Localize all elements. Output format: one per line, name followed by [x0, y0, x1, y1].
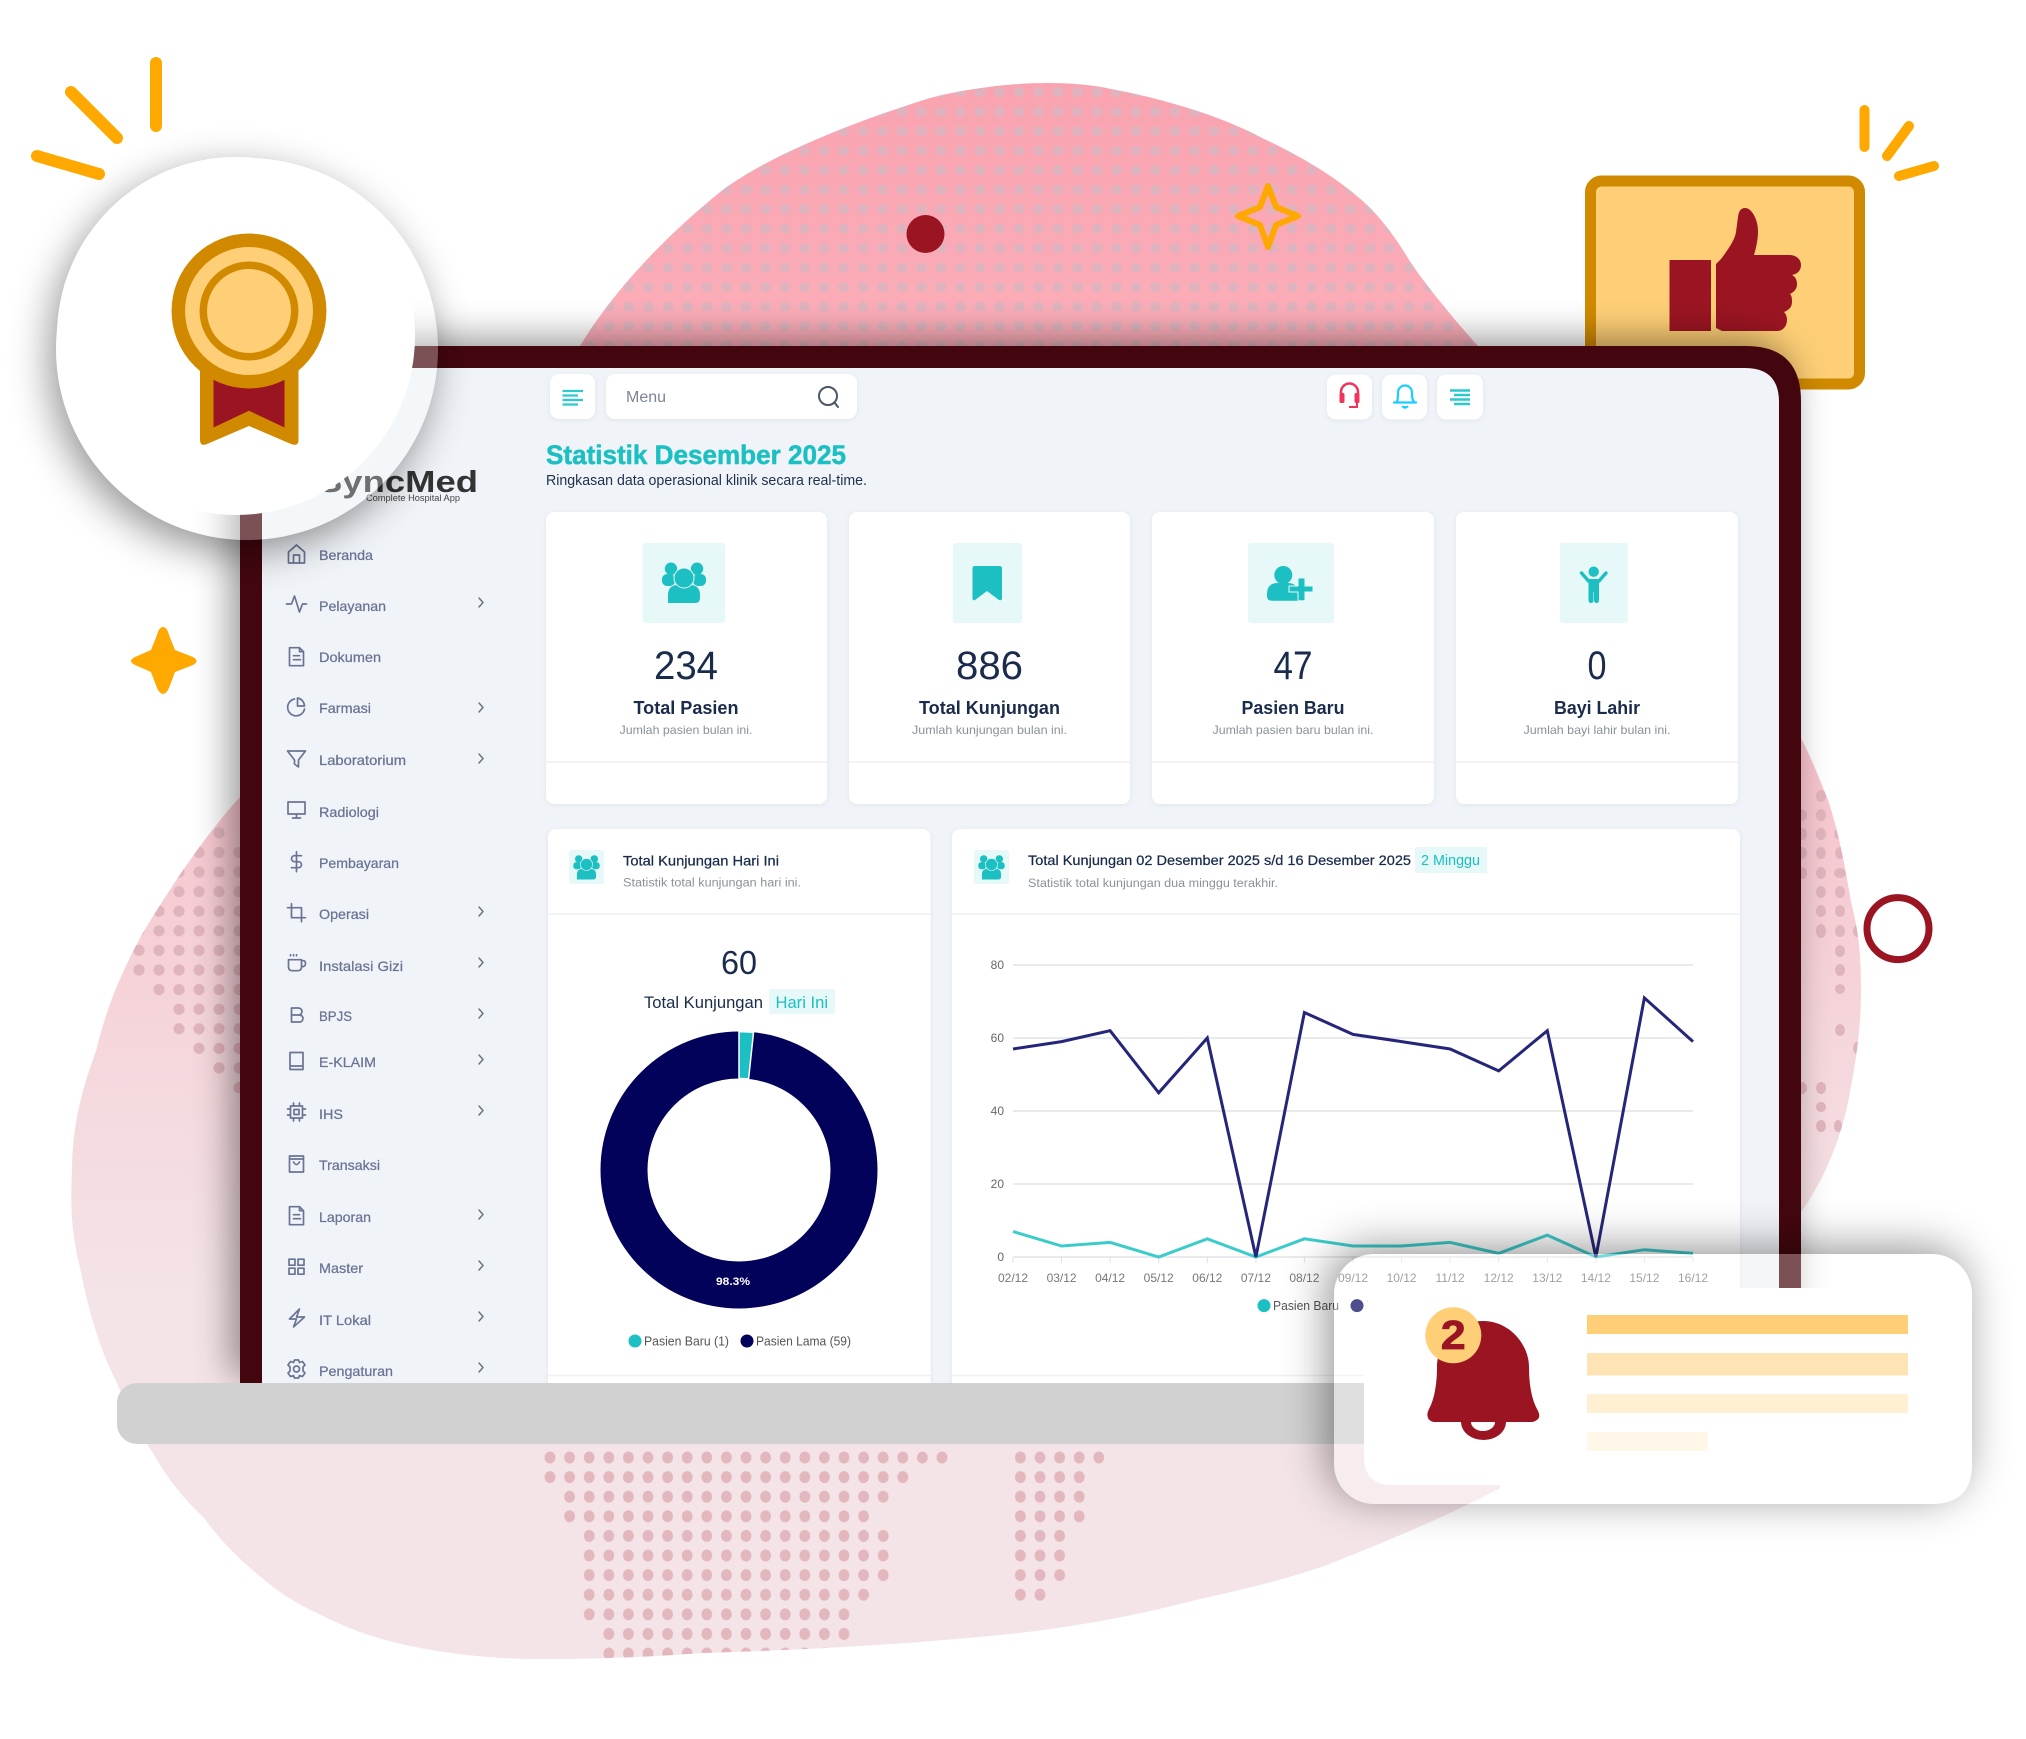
menu item: Operasi: Operasi	[319, 906, 369, 922]
menu item: IT Lokal	[290, 1309, 483, 1328]
page title: Statistik Desember 2025	[546, 440, 846, 470]
panel subheading: Statistik total kunjungan hari ini.	[623, 878, 801, 890]
y axis labels: 0	[997, 1250, 1004, 1264]
dotted map pattern on lower blob	[129, 790, 1861, 1663]
sparkle lines: award	[37, 63, 156, 174]
stat card: Pasien Baru	[1152, 512, 1434, 804]
menu item: Master	[289, 1259, 483, 1276]
stat card: Bayi Lahir: Bayi Lahir	[1554, 698, 1640, 718]
menu item: Beranda: Beranda	[319, 547, 373, 563]
menu item: Pelayanan: Pelayanan	[319, 598, 386, 614]
menu item: IHS	[288, 1103, 483, 1122]
stat card: Pasien Baru: Jumlah pasien baru bulan ini.	[1212, 723, 1374, 737]
duration badge: 2 Minggu	[1421, 852, 1480, 869]
panel icon	[569, 850, 604, 884]
menu item: Transaksi: Transaksi	[319, 1157, 380, 1173]
stat card: Pasien Baru: 47	[1274, 644, 1312, 688]
laptop frame	[240, 346, 1801, 1400]
menu item: Instalasi Gizi: Instalasi Gizi	[319, 958, 403, 974]
chart legend	[1258, 1299, 1439, 1313]
x axis labels: 14/12	[1581, 1271, 1611, 1285]
menu item: Laporan	[290, 1207, 483, 1225]
notification card shadow	[1334, 1254, 1972, 1504]
menu item: Pembayaran	[292, 852, 399, 872]
panel heading: Total Kunjungan Hari Ini	[623, 852, 779, 868]
thumbs up card	[1590, 181, 1860, 384]
dashboard screen	[262, 368, 1779, 1409]
line chart	[991, 958, 1708, 1285]
page subtitle: Ringkasan data operasional klinik secara real-time.	[546, 473, 867, 489]
solid orange star	[131, 627, 196, 694]
sidebar logo: SyncMed	[318, 464, 478, 499]
background blob: lower pink	[71, 700, 1861, 1659]
x axis labels: 10/12	[1387, 1271, 1417, 1285]
y axis labels: 40	[991, 1104, 1004, 1118]
series: Pasien Lama	[1013, 998, 1693, 1257]
top bar: hamburger button	[550, 374, 595, 419]
menu item: Farmasi	[288, 698, 483, 716]
base bar of laptop	[117, 1383, 1517, 1444]
chart legend: Pasien Lama	[1366, 1299, 1439, 1313]
stat card: Bayi Lahir: 0	[1588, 644, 1606, 688]
total label with badge: Total Kunjungan	[644, 994, 763, 1012]
x axis labels: 04/12	[1095, 1271, 1125, 1285]
red dot	[906, 215, 944, 253]
x axis labels: 06/12	[1192, 1271, 1223, 1285]
stat card: Total Pasien: Jumlah pasien bulan ini.	[620, 723, 752, 737]
x axis labels: 03/12	[1047, 1271, 1077, 1285]
y axis labels: 20	[991, 1177, 1004, 1191]
x axis labels: 13/12	[1532, 1271, 1563, 1285]
menu item: Transaksi	[290, 1156, 380, 1173]
x axis labels: 07/12	[1241, 1271, 1271, 1285]
menu item: Pengaturan: Pengaturan	[319, 1363, 393, 1379]
menu item: Radiologi	[288, 802, 379, 820]
x axis labels: 08/12	[1289, 1271, 1320, 1285]
sidebar menu	[286, 545, 483, 1379]
top bar: headset button	[1327, 374, 1372, 420]
menu item: Pelayanan	[286, 596, 483, 614]
panel: two-week line chart	[952, 829, 1740, 1409]
menu item: Master: Master	[319, 1260, 363, 1276]
stat card: Total Pasien: 234	[654, 644, 718, 688]
x axis labels: 11/12	[1436, 1271, 1465, 1285]
donut legend: Pasien Lama (59)	[756, 1334, 851, 1348]
panel icon	[974, 850, 1009, 884]
top bar: align menu button	[1437, 374, 1483, 420]
total label with badge	[644, 989, 835, 1014]
notification placeholder lines	[1587, 1315, 1908, 1451]
stat card: Total Kunjungan: 886	[956, 644, 1023, 688]
menu item: Radiologi: Radiologi	[319, 804, 379, 820]
panel subheading: Statistik total kunjungan dua minggu terakhir.	[1028, 878, 1278, 890]
panel: donut chart today	[548, 829, 930, 1409]
donut chart	[624, 1032, 854, 1288]
stat card: Total Pasien	[546, 512, 827, 804]
menu item: Pembayaran: Pembayaran	[319, 855, 399, 871]
series: Pasien Baru	[1013, 1232, 1693, 1257]
top bar: bell button	[1382, 374, 1427, 420]
donut legend	[628, 1334, 851, 1348]
notification card	[1334, 1254, 1972, 1504]
menu item: IT Lokal: IT Lokal	[319, 1312, 371, 1328]
red ring	[1867, 898, 1929, 960]
notification count badge: 2	[1441, 1312, 1466, 1358]
x axis labels: 16/12	[1678, 1271, 1708, 1285]
y axis labels: 80	[991, 958, 1004, 972]
donut legend: Pasien Baru (1)	[644, 1334, 729, 1348]
outlined star	[1238, 186, 1298, 247]
y axis labels	[991, 958, 1004, 1264]
menu item: BPJS	[292, 1008, 483, 1024]
notification bell icon	[1427, 1321, 1539, 1440]
x axis labels: 15/12	[1629, 1271, 1660, 1285]
top bar: search box: Menu	[626, 389, 666, 406]
x axis labels: 12/12	[1484, 1271, 1514, 1285]
menu item: Laboratorium	[288, 751, 483, 768]
x axis labels: 09/12	[1338, 1271, 1368, 1285]
sparkle lines: thumbs up	[1864, 110, 1934, 176]
award circle	[56, 157, 438, 540]
menu item: Farmasi: Farmasi	[319, 700, 371, 716]
stat card: Total Kunjungan	[849, 512, 1130, 804]
menu item: Dokumen: Dokumen	[319, 649, 381, 665]
background blob: top pink	[560, 83, 1510, 380]
stat card: Bayi Lahir	[1456, 512, 1738, 804]
notification count badge	[1425, 1307, 1481, 1363]
menu item: Instalasi Gizi	[288, 955, 483, 974]
medal icon	[178, 240, 320, 445]
top bar: search box	[606, 374, 857, 419]
menu item: Laboratorium: Laboratorium	[319, 752, 406, 768]
stat card: Total Kunjungan: Jumlah kunjungan bulan ini.	[912, 723, 1067, 737]
x axis labels	[998, 1271, 1708, 1285]
duration badge	[1415, 847, 1487, 873]
total label with badge: Hari Ini	[776, 994, 828, 1012]
menu item: IHS: IHS	[319, 1106, 343, 1122]
menu item: BPJS: BPJS	[319, 1008, 352, 1024]
menu item: E-KLAIM: E-KLAIM	[319, 1054, 376, 1070]
menu item: Operasi	[288, 904, 483, 922]
stat card: Pasien Baru: Pasien Baru	[1242, 698, 1344, 718]
menu item: Dokumen	[290, 648, 381, 666]
award circle shadow	[56, 157, 438, 540]
y axis labels: 60	[991, 1031, 1004, 1045]
panel heading: Total Kunjungan 02 Desember 2025 s/d 16 Desember 2025	[1028, 852, 1411, 868]
chart legend: Pasien Baru	[1273, 1299, 1339, 1313]
sidebar logo: Complete Hospital App	[366, 493, 460, 503]
menu item: Laporan: Laporan	[319, 1209, 371, 1225]
x axis labels: 02/12	[998, 1271, 1028, 1285]
stat card: Total Kunjungan: Total Kunjungan	[919, 698, 1060, 718]
menu item: Pengaturan	[288, 1360, 483, 1379]
menu item: E-KLAIM	[290, 1052, 483, 1070]
stat card: Bayi Lahir: Jumlah bayi lahir bulan ini.	[1524, 723, 1670, 737]
menu item: Beranda	[288, 545, 373, 563]
laptop frame shadow	[240, 346, 1801, 1383]
x axis labels: 05/12	[1144, 1271, 1174, 1285]
total value: 60	[721, 944, 757, 981]
donut chart: 98.3%	[716, 1276, 750, 1288]
stat card: Total Pasien: Total Pasien	[634, 698, 738, 718]
